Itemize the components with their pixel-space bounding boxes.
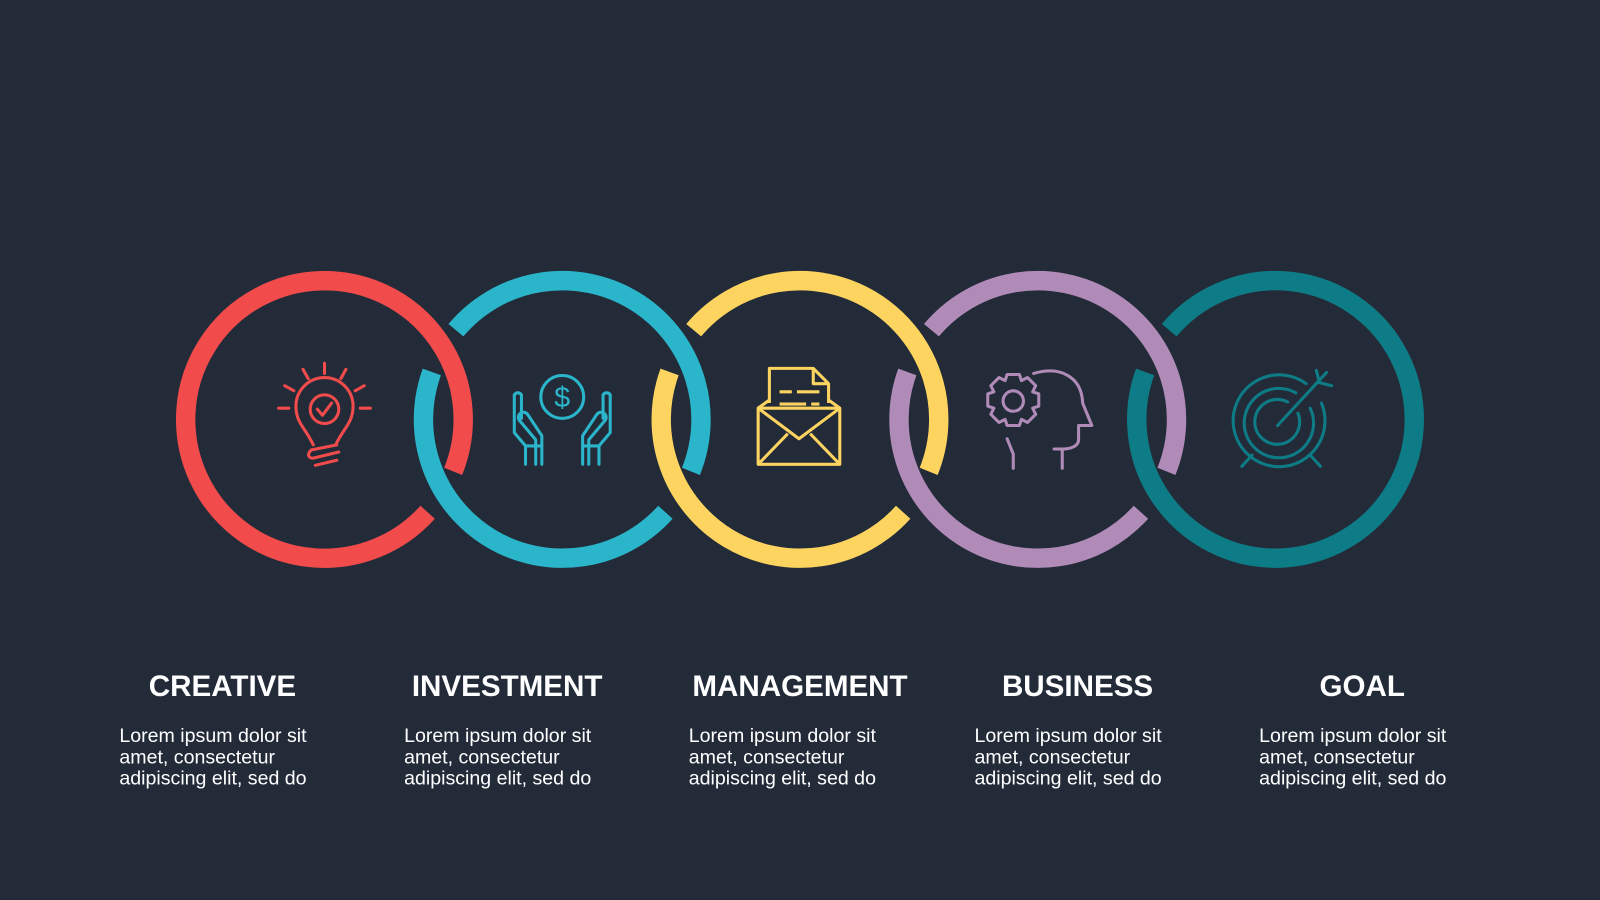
text: business: adipiscing elit, sed do: [974, 768, 1162, 790]
icon: envelope with document: [758, 368, 840, 464]
ring: creative: [186, 281, 463, 558]
text: creative: adipiscing elit, sed do: [119, 768, 307, 790]
text: business: amet, consectetur: [974, 746, 1131, 768]
text: investment: Lorem ipsum dolor sit: [404, 725, 592, 747]
icon: head with gear: [988, 371, 1092, 468]
text: goal: adipiscing elit, sed do: [1259, 768, 1446, 790]
text: management: Lorem ipsum dolor sit: [689, 725, 876, 747]
text: management: [689, 725, 876, 790]
heading: investment: INVESTMENT: [412, 670, 602, 703]
text: business: [974, 725, 1162, 790]
text: creative: [119, 725, 307, 790]
text: goal: Lorem ipsum dolor sit: [1259, 725, 1447, 747]
icon: hands with dollar: [514, 376, 610, 464]
heading: goal: GOAL: [1320, 670, 1405, 703]
ring: business: [899, 281, 1177, 558]
text: investment: [404, 725, 592, 790]
ring: investment: [423, 281, 701, 558]
icon: hands with dollar: $: [554, 382, 570, 414]
text: goal: amet, consectetur: [1259, 746, 1415, 768]
heading: business: BUSINESS: [1002, 670, 1153, 703]
text: investment: amet, consectetur: [404, 746, 560, 768]
ring: management: [661, 281, 939, 558]
text: business: Lorem ipsum dolor sit: [974, 725, 1162, 747]
ring: goal: [1137, 281, 1414, 558]
heading: management: MANAGEMENT: [692, 670, 908, 703]
text: management: adipiscing elit, sed do: [689, 768, 876, 790]
icon: target with arrow: [1233, 370, 1332, 467]
text: creative: Lorem ipsum dolor sit: [119, 725, 307, 747]
text: management: amet, consectetur: [689, 746, 845, 768]
text: creative: amet, consectetur: [119, 746, 275, 768]
heading: creative: CREATIVE: [149, 670, 296, 703]
icon: lightbulb: [279, 363, 370, 465]
text: investment: adipiscing elit, sed do: [404, 768, 591, 790]
text: goal: [1259, 725, 1447, 790]
